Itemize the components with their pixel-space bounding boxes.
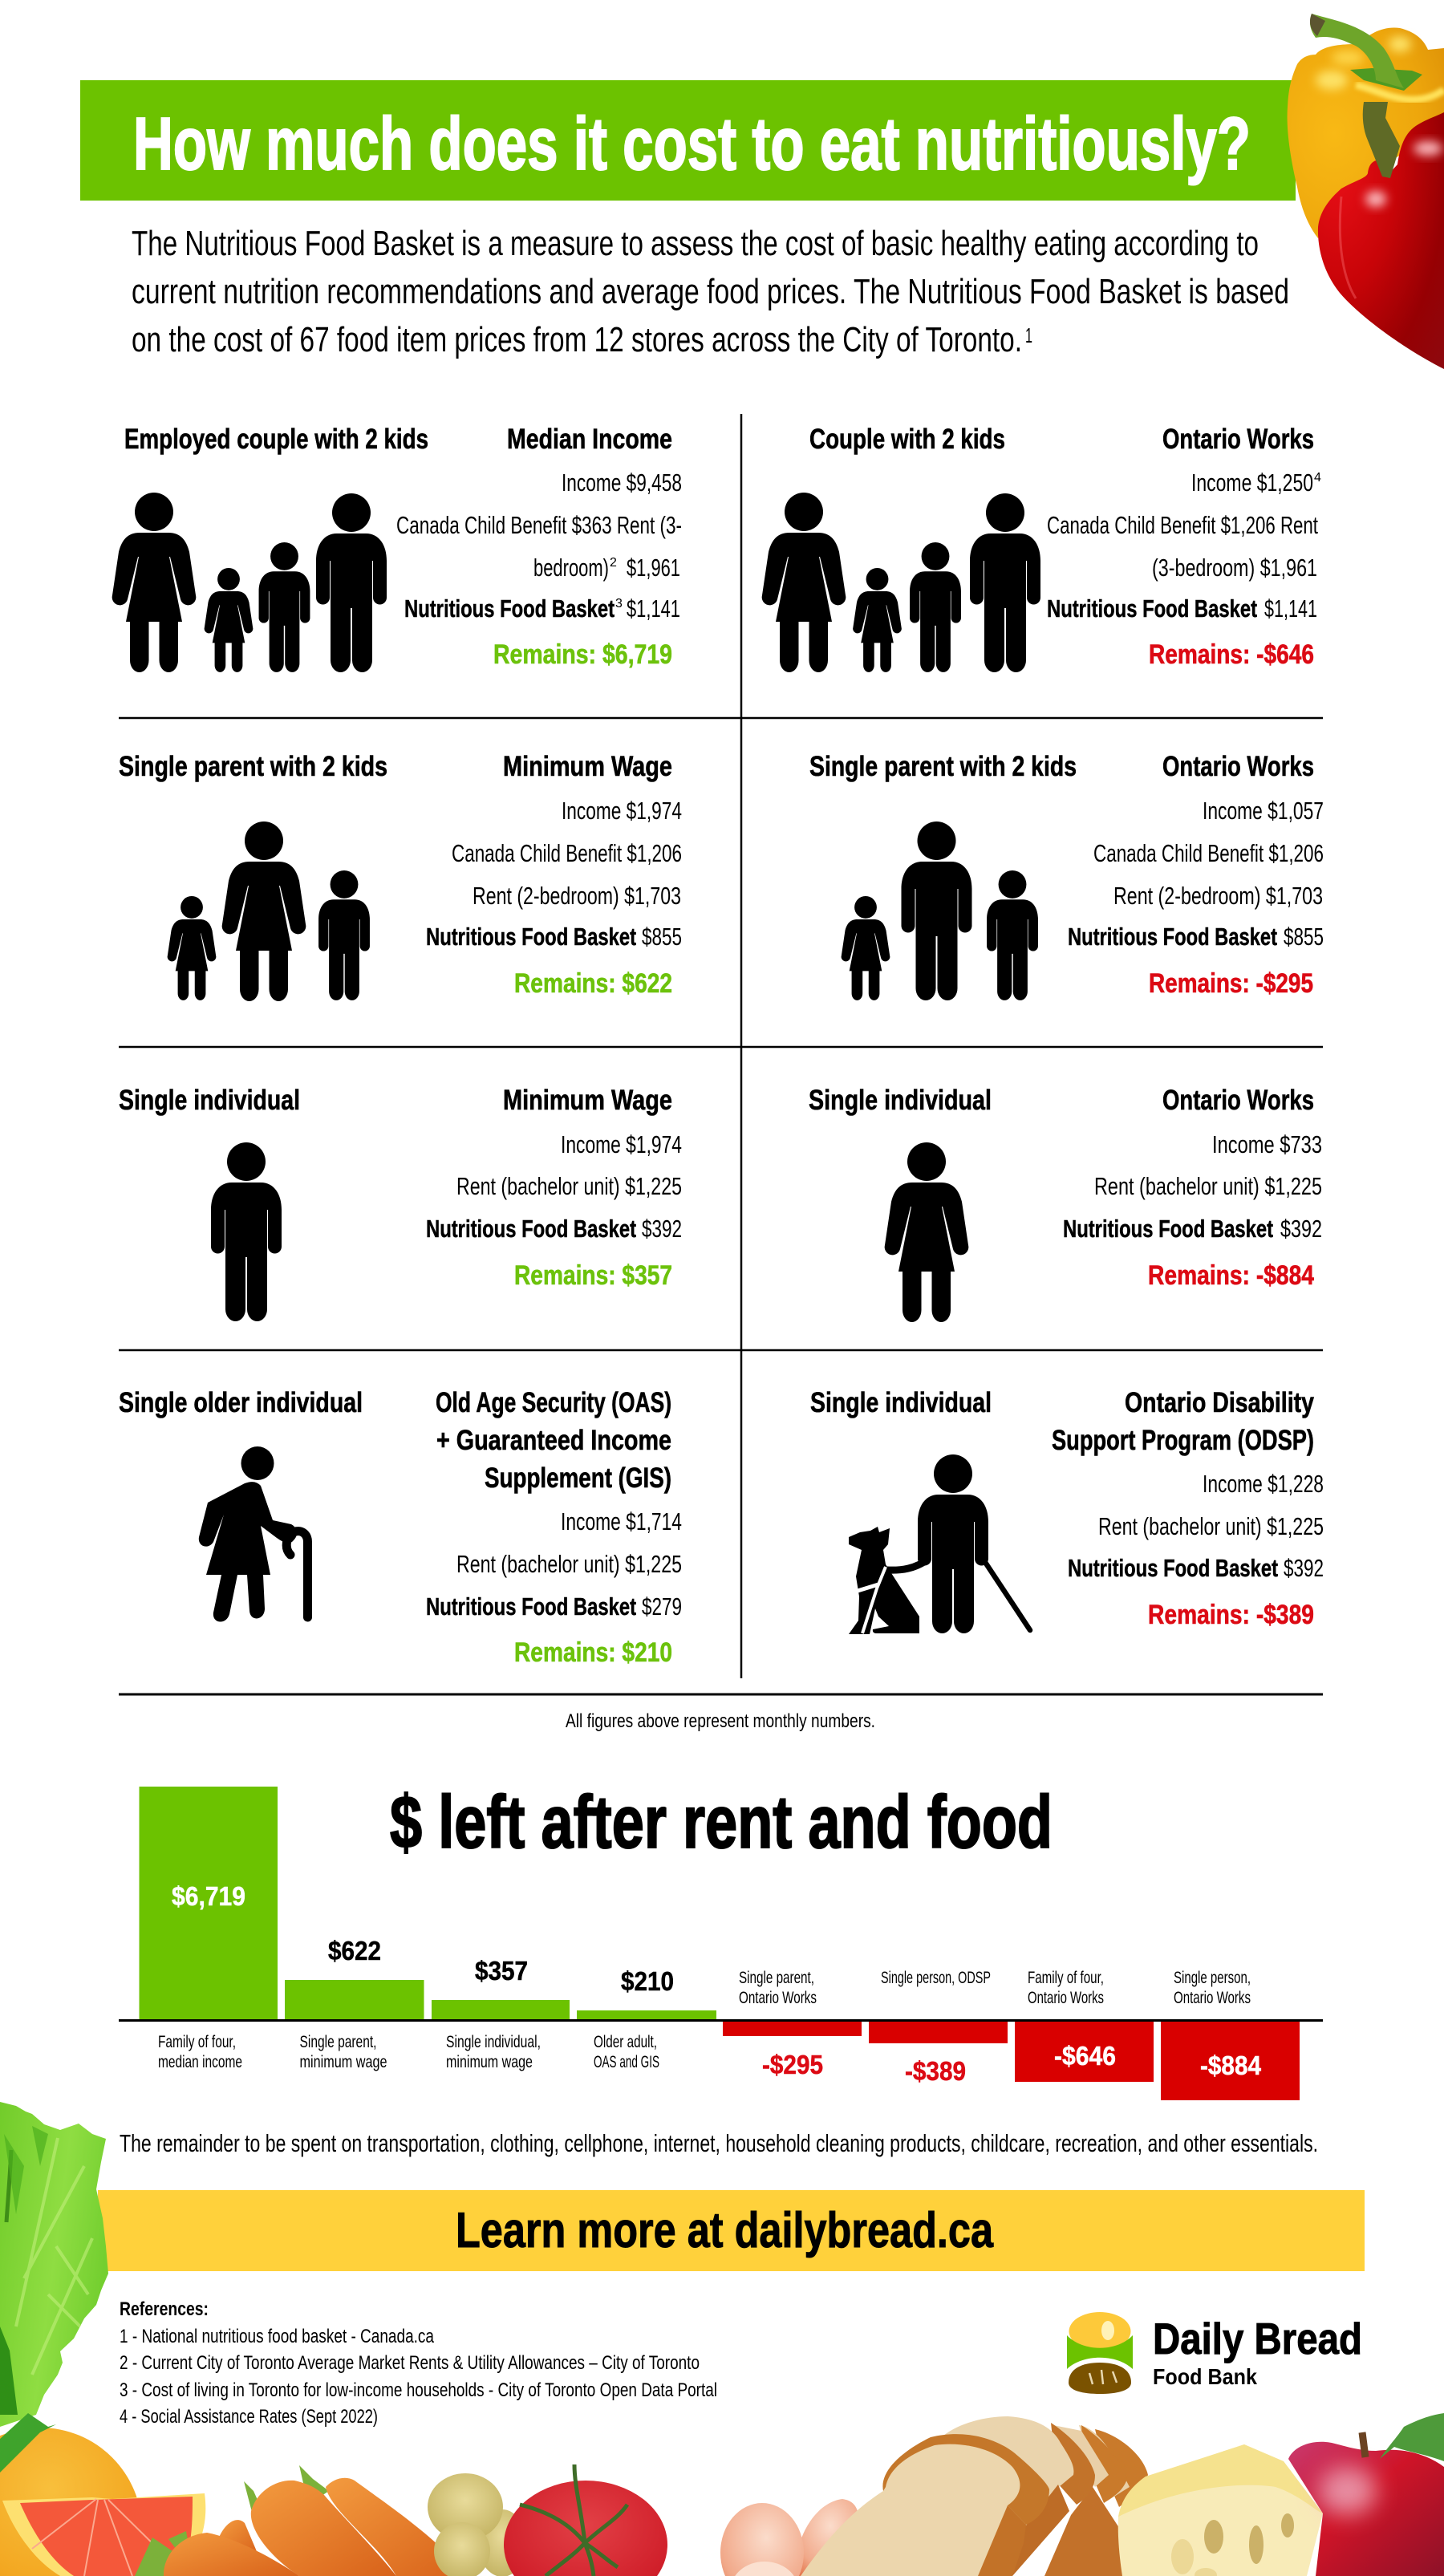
icon: person with cane and guide dog bbox=[849, 1454, 1030, 1634]
figures: Income $1,057 bbox=[1203, 797, 1324, 825]
figures: Canada Child Benefit $1,206 bbox=[452, 839, 682, 867]
income type: Ontario Works bbox=[1162, 1085, 1314, 1116]
logo mark bbox=[1067, 2312, 1133, 2394]
figures: Rent (2-bedroom) $1,703 bbox=[1113, 882, 1323, 910]
icon: man bbox=[211, 1142, 282, 1321]
figures: $1,141 bbox=[1264, 594, 1317, 623]
category labels: Single parent, bbox=[739, 1969, 814, 1987]
panel: single individual odsp bbox=[810, 1387, 1324, 1634]
icon: cheese bbox=[1118, 2444, 1323, 2576]
figures bbox=[426, 1507, 682, 1621]
heading: Single individual bbox=[809, 1085, 992, 1116]
category labels: Ontario Works bbox=[739, 1989, 817, 2007]
figures: 2 bbox=[610, 556, 617, 570]
call to action text: Learn more at dailybread.ca bbox=[456, 2203, 993, 2258]
icon: grapefruit slice bbox=[2, 2493, 205, 2576]
remains: Remains: -$884 bbox=[1148, 1260, 1314, 1291]
logo subline: Food Bank bbox=[1153, 2364, 1257, 2389]
chart heading: $ left after rent and food bbox=[390, 1780, 1053, 1864]
axis bbox=[119, 2019, 1323, 2022]
figures: Nutritious Food Basket bbox=[1047, 594, 1257, 623]
figures: 4 bbox=[1314, 471, 1321, 485]
icon: tomato bbox=[504, 2464, 667, 2576]
category labels: median income bbox=[158, 2053, 242, 2071]
figures: Income $1,974 bbox=[561, 1130, 682, 1158]
heading: Single older individual bbox=[119, 1387, 363, 1418]
figures: Rent (bachelor unit) $1,225 bbox=[456, 1550, 682, 1578]
figures: Income $1,250 bbox=[1191, 469, 1313, 497]
income type: Ontario Disability bbox=[1125, 1387, 1314, 1418]
figures: $855 bbox=[1284, 923, 1324, 951]
icon: older woman with cane bbox=[199, 1446, 308, 1622]
income type: Support Program (ODSP) bbox=[1052, 1425, 1314, 1456]
figures: Nutritious Food Basket bbox=[426, 1592, 636, 1621]
figures: Rent (2-bedroom) $1,703 bbox=[473, 882, 681, 910]
income type: Old Age Security (OAS) bbox=[436, 1387, 671, 1418]
heading: Single parent with 2 kids bbox=[809, 751, 1077, 782]
figures: Rent (bachelor unit) $1,225 bbox=[1098, 1512, 1324, 1540]
remains: Remains: -$295 bbox=[1149, 968, 1313, 999]
references: 2 - Current City of Toronto Average Market Rents & Utility Allowances – City of Toronto bbox=[120, 2352, 700, 2374]
figures: Nutritious Food Basket bbox=[426, 1215, 636, 1243]
income type bbox=[1052, 1387, 1314, 1456]
panel: employed couple median income bbox=[112, 424, 682, 672]
figures bbox=[396, 469, 682, 623]
category labels: Single person, ODSP bbox=[881, 1969, 991, 1987]
figures: Nutritious Food Basket bbox=[426, 923, 636, 951]
remains: Remains: -$646 bbox=[1149, 639, 1314, 670]
value labels: $210 bbox=[621, 1966, 674, 1996]
references: 3 - Cost of living in Toronto for low-income households - City of Toronto Open Data Portal bbox=[120, 2379, 717, 2401]
icon: lettuce bbox=[0, 2102, 108, 2427]
income type: Ontario Works bbox=[1162, 424, 1314, 455]
intro text block: 1 bbox=[1025, 323, 1032, 347]
figures bbox=[426, 797, 682, 951]
figures: $855 bbox=[642, 923, 682, 951]
remains: Remains: -$389 bbox=[1148, 1600, 1314, 1630]
figures: $392 bbox=[1280, 1215, 1322, 1243]
figures: Rent (bachelor unit) $1,225 bbox=[1094, 1172, 1322, 1200]
remains: Remains: $622 bbox=[514, 968, 672, 999]
panel: single individual ontario works bbox=[809, 1085, 1322, 1322]
figures bbox=[1047, 469, 1321, 623]
figures: Nutritious Food Basket bbox=[1068, 923, 1277, 951]
category labels: minimum wage bbox=[446, 2053, 533, 2071]
grid dividers bbox=[119, 414, 1323, 1694]
heading: Single individual bbox=[119, 1085, 300, 1116]
panel: single older individual bbox=[119, 1387, 682, 1668]
call to action banner bbox=[98, 2190, 1365, 2271]
figures: Canada Child Benefit $1,206 Rent bbox=[1047, 511, 1318, 539]
bar chart: money left after rent and food bbox=[119, 1787, 1323, 2100]
value labels: $6,719 bbox=[172, 1881, 245, 1911]
income type: Supplement (GIS) bbox=[485, 1462, 671, 1494]
references: 4 - Social Assistance Rates (Sept 2022) bbox=[120, 2406, 378, 2428]
figures bbox=[1068, 1470, 1324, 1582]
intro text block bbox=[132, 224, 1289, 359]
income type: Minimum Wage bbox=[503, 1085, 672, 1116]
category labels: Single parent, bbox=[300, 2033, 377, 2051]
heading: Couple with 2 kids bbox=[809, 424, 1005, 455]
category labels: minimum wage bbox=[300, 2053, 387, 2071]
icon: family of four bbox=[762, 493, 1040, 672]
note: monthly figures: All figures above represent monthly numbers. bbox=[566, 1710, 875, 1732]
heading: Single parent with 2 kids bbox=[119, 751, 387, 782]
icon: apple bbox=[1288, 2413, 1444, 2576]
icon: bread slices bbox=[801, 2416, 1148, 2576]
food strip: eggs, bread, cheese, apple bbox=[720, 2413, 1444, 2576]
figures: Canada Child Benefit $363 Rent (3- bbox=[396, 511, 682, 539]
category labels: Family of four, bbox=[158, 2033, 236, 2051]
figures: Nutritious Food Basket bbox=[1068, 1554, 1278, 1582]
income type: Ontario Works bbox=[1162, 751, 1314, 782]
figures bbox=[1063, 1130, 1322, 1243]
icon: carrot greens bbox=[135, 2465, 329, 2576]
icon: yellow pepper bbox=[1288, 14, 1444, 238]
icon: red pepper bbox=[1318, 102, 1444, 369]
category labels: Family of four, bbox=[1028, 1969, 1104, 1987]
figures: bedroom) bbox=[533, 554, 609, 582]
icon: potatoes bbox=[428, 2473, 526, 2576]
icon: parent and two kids bbox=[168, 821, 370, 1001]
icon: woman bbox=[885, 1142, 968, 1322]
figures: Income $9,458 bbox=[562, 469, 682, 497]
intro text block: on the cost of 67 food item prices from 12 stores across the City of Toronto. bbox=[132, 320, 1022, 359]
icon: family of four bbox=[112, 493, 387, 672]
category labels bbox=[158, 1969, 1251, 2071]
icon: parent and two kids bbox=[842, 821, 1038, 1000]
icon: eggs bbox=[720, 2499, 858, 2576]
remains: Remains: $210 bbox=[514, 1637, 672, 1668]
category labels: OAS and GIS bbox=[594, 2053, 659, 2071]
figures: Income $733 bbox=[1212, 1130, 1322, 1158]
figures: $279 bbox=[642, 1592, 682, 1621]
logo: Daily Bread Food Bank bbox=[1067, 2312, 1362, 2394]
figures: $1,961 bbox=[627, 554, 680, 582]
value labels: -$884 bbox=[1200, 2051, 1262, 2080]
heading: Employed couple with 2 kids bbox=[124, 424, 428, 455]
heading: Single individual bbox=[810, 1387, 992, 1418]
value labels: $622 bbox=[328, 1936, 381, 1965]
income type: Minimum Wage bbox=[503, 751, 672, 782]
panel: single individual minimum wage bbox=[119, 1085, 682, 1321]
references: References: bbox=[120, 2298, 209, 2320]
figures: (3-bedroom) $1,961 bbox=[1152, 554, 1317, 582]
icon: orange bbox=[0, 2413, 142, 2576]
income type: Median Income bbox=[507, 424, 672, 455]
value labels: -$295 bbox=[762, 2050, 823, 2079]
panel: couple ontario works bbox=[762, 424, 1321, 672]
value labels bbox=[172, 1881, 1262, 2086]
food strip: fruit and vegetables bbox=[0, 2413, 667, 2576]
figures bbox=[426, 1130, 682, 1243]
remains: Remains: $357 bbox=[514, 1260, 672, 1291]
figures: Nutritious Food Basket bbox=[404, 594, 615, 623]
category labels: Ontario Works bbox=[1028, 1989, 1104, 2007]
value labels: $357 bbox=[475, 1956, 528, 1986]
remains: Remains: $6,719 bbox=[493, 639, 672, 670]
figures: Income $1,228 bbox=[1203, 1470, 1324, 1498]
figures bbox=[1068, 797, 1324, 951]
income type: + Guaranteed Income bbox=[436, 1425, 671, 1456]
references bbox=[120, 2298, 717, 2428]
figures: $392 bbox=[1284, 1554, 1324, 1582]
positive bars bbox=[140, 1787, 716, 2020]
logo wordmark: Daily Bread bbox=[1153, 2314, 1362, 2363]
income type bbox=[436, 1387, 671, 1494]
category labels: Single individual, bbox=[446, 2033, 541, 2051]
category labels: Ontario Works bbox=[1174, 1989, 1251, 2007]
title banner bbox=[80, 80, 1296, 201]
value labels: -$389 bbox=[905, 2056, 966, 2086]
category labels: Single person, bbox=[1174, 1969, 1251, 1987]
figures: $392 bbox=[642, 1215, 682, 1243]
value labels: -$646 bbox=[1054, 2041, 1116, 2071]
panel: single parent minimum wage bbox=[119, 751, 682, 1001]
figures: Income $1,714 bbox=[561, 1507, 682, 1535]
figures: $1,141 bbox=[627, 594, 680, 623]
figures: Canada Child Benefit $1,206 bbox=[1093, 839, 1324, 867]
figures: Rent (bachelor unit) $1,225 bbox=[456, 1172, 682, 1200]
category labels: Older adult, bbox=[594, 2033, 657, 2051]
negative bars bbox=[723, 2021, 1300, 2100]
references: 1 - National nutritious food basket - Canada.ca bbox=[120, 2326, 435, 2347]
figures: Income $1,974 bbox=[562, 797, 682, 825]
figures: 3 bbox=[615, 597, 623, 611]
panel: single parent ontario works bbox=[809, 751, 1324, 1000]
figures: Nutritious Food Basket bbox=[1063, 1215, 1273, 1243]
icon: carrots bbox=[164, 2478, 465, 2576]
